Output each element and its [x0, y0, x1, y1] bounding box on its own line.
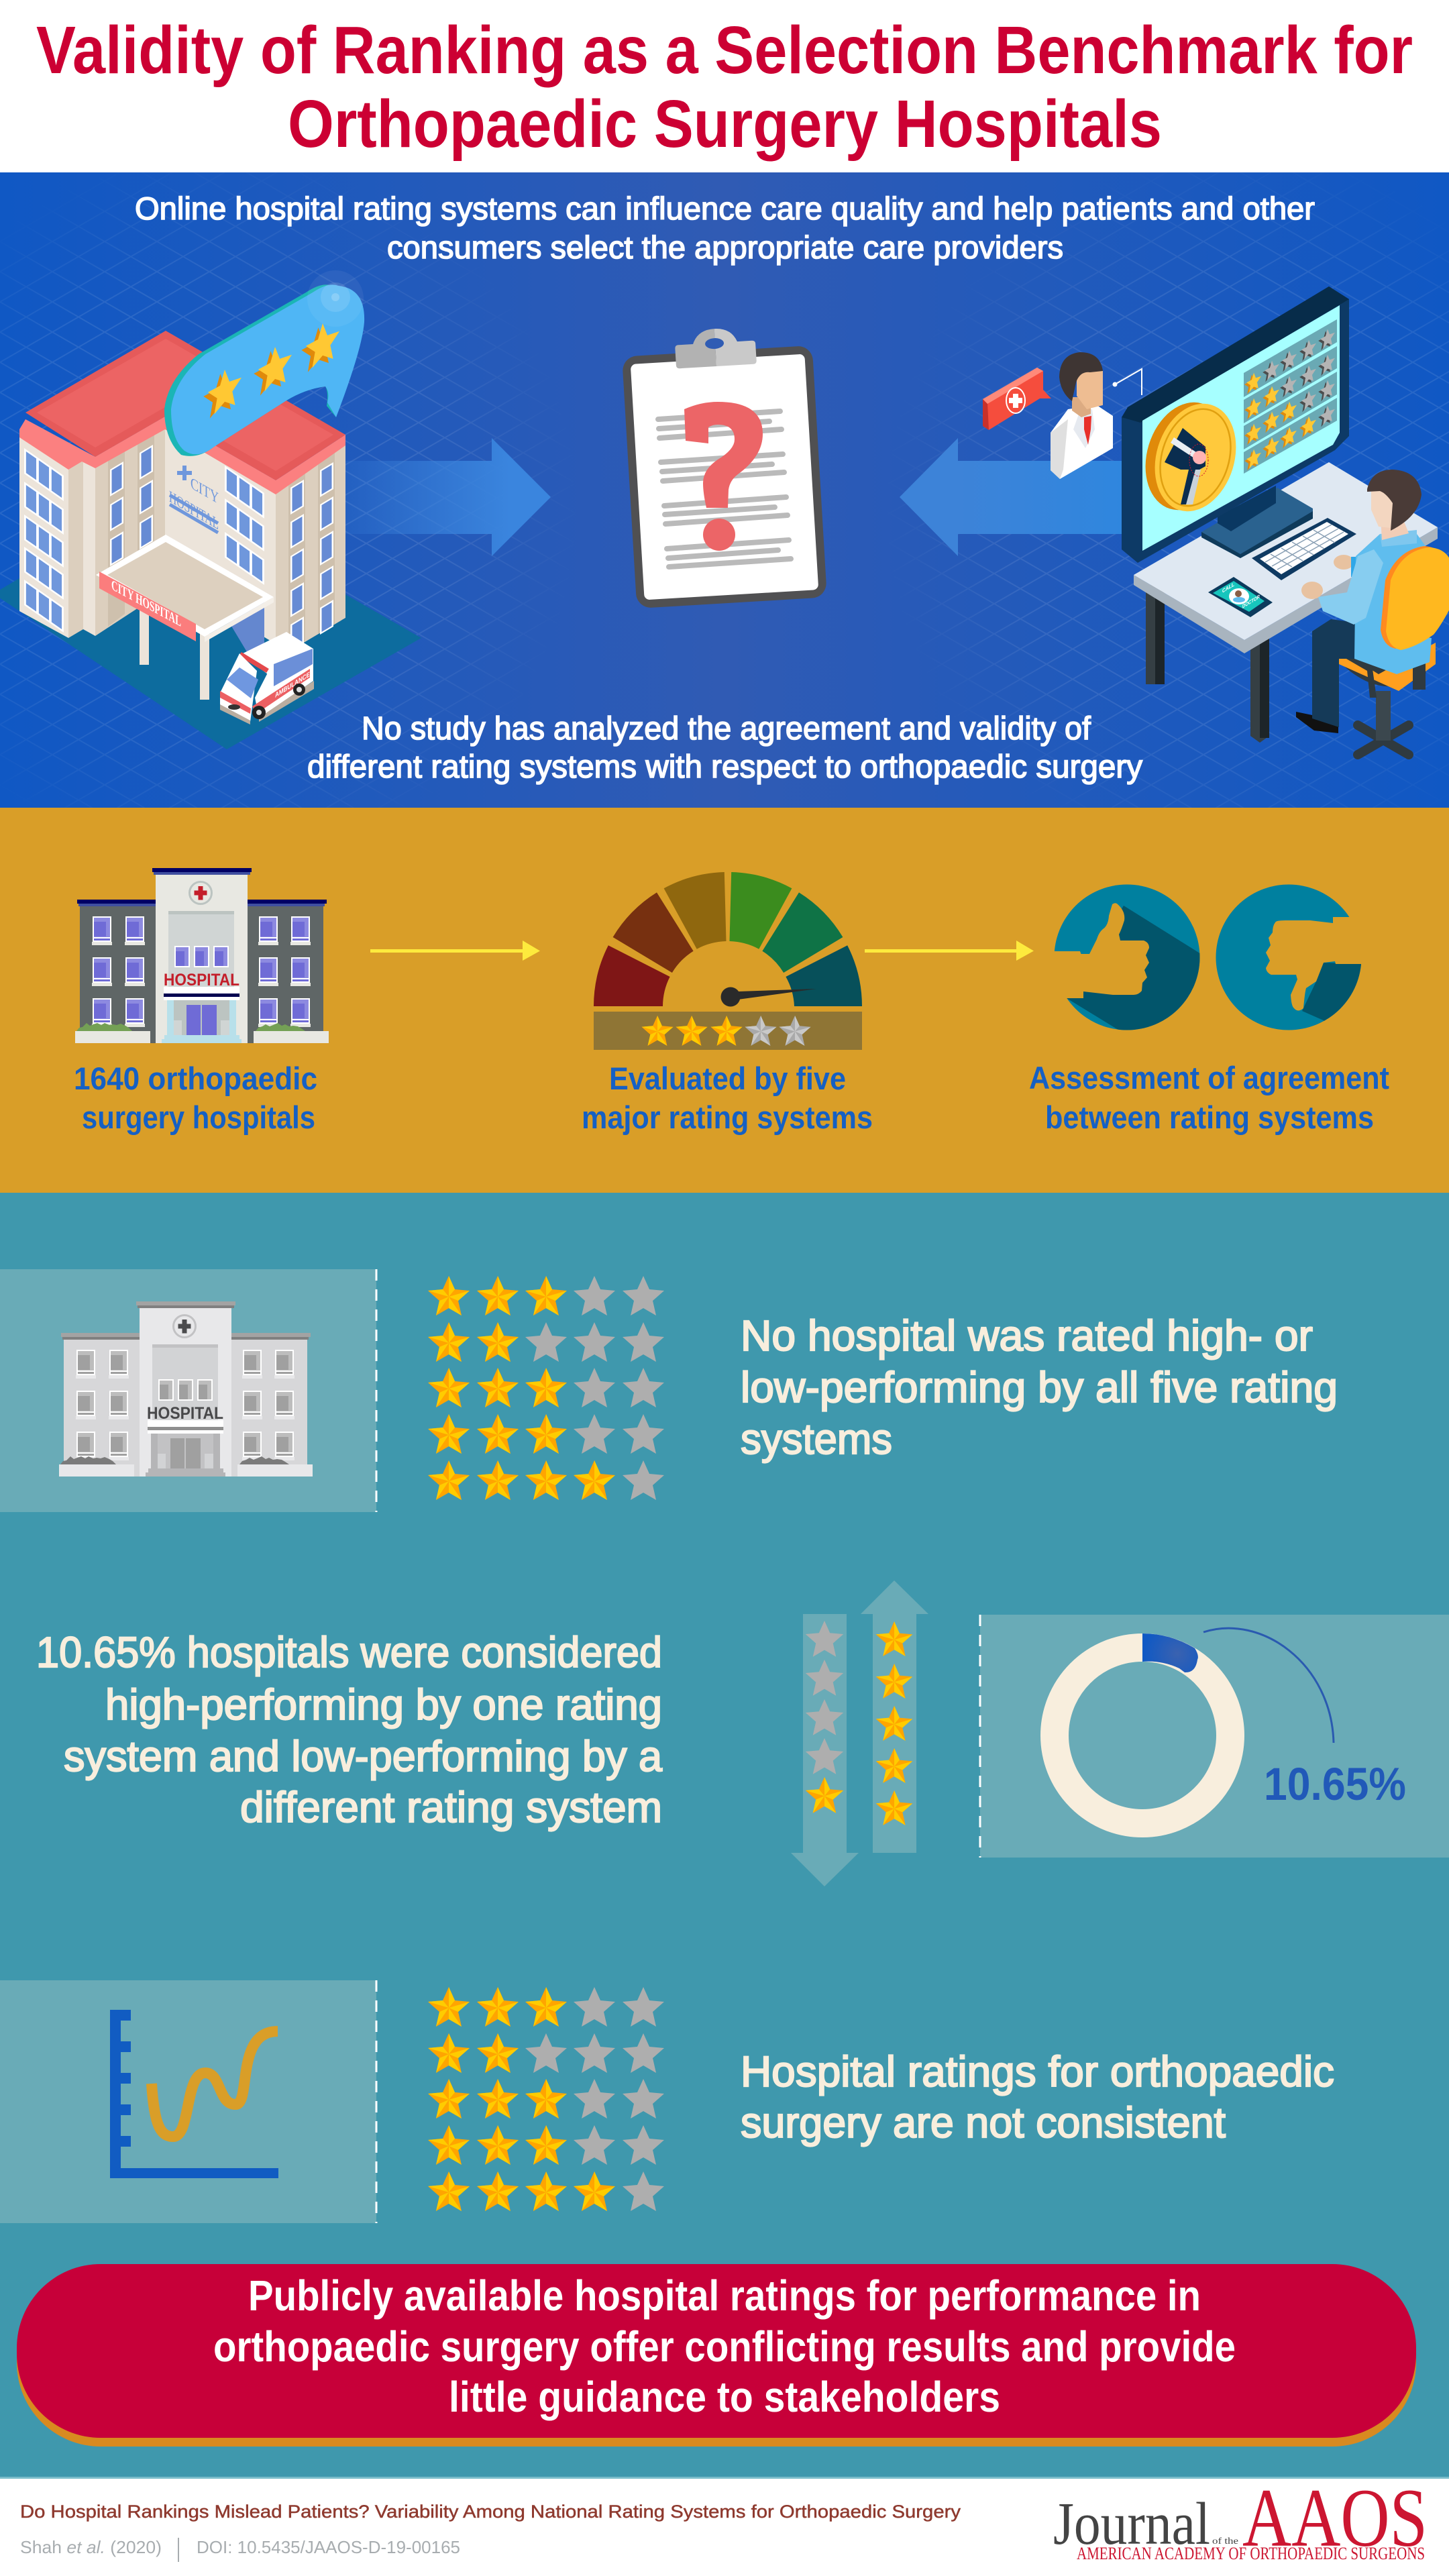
finding 2: text: system and low-performing by a [64, 1732, 662, 1780]
illustration: patient reviewing hospital ratings at computer [1122, 286, 1449, 755]
clipboard clip [674, 327, 757, 369]
on-screen ratings [1244, 319, 1337, 474]
finding 2: up arrow with stars [861, 1580, 928, 1853]
finding 1: text [741, 1311, 1338, 1463]
finding 3: text: Hospital ratings for orthopaedic [741, 2047, 1334, 2096]
entrance canopy: CITY HOSPITAL [111, 576, 181, 630]
phone [1208, 577, 1273, 617]
title [36, 13, 1413, 162]
intro text: consumers select the appropriate care providers [387, 229, 1063, 265]
title: Orthopaedic Surgery Hospitals [288, 87, 1162, 162]
finding 1: text: No hospital was rated high- or [741, 1311, 1313, 1360]
callout: conclusion [17, 2264, 1416, 2447]
computer monitor [1122, 286, 1349, 563]
icon: thumbs down [1216, 884, 1368, 1033]
finding 1: star rating grid [428, 1276, 664, 1500]
finding 2: down arrow with stars [791, 1614, 859, 1886]
text: assessment: Assessment of agreement [1029, 1060, 1389, 1095]
arrow: hospital to clipboard [345, 438, 551, 556]
finding 2: text: different rating system [240, 1783, 662, 1831]
finding 1: hospital panel [0, 1269, 376, 1512]
ambulance: AMBULANCE [275, 671, 310, 700]
donut chart 10.65% [1055, 1633, 1230, 1823]
leader line [1203, 1628, 1334, 1743]
arrow [370, 941, 540, 961]
arrow: computer to clipboard [900, 438, 1122, 556]
text: rating systems: Evaluated by five [609, 1061, 846, 1096]
footer citation [20, 2502, 961, 2562]
callout: conclusion: little guidance to stakeholders [449, 2373, 1000, 2421]
finding 3: text: surgery are not consistent [741, 2098, 1226, 2147]
text lines [658, 411, 791, 567]
illustration: doctor with medical speech bubble [983, 352, 1142, 479]
text: hospitals: surgery hospitals [82, 1099, 315, 1135]
chair base [1335, 637, 1436, 755]
entrance canopy [96, 535, 274, 700]
finding 3: star rating grid [428, 1987, 664, 2211]
conclusion text of blue panel: No study has analyzed the agreement and validity of [362, 711, 1091, 747]
icon: gray hospital [59, 1301, 313, 1477]
illustration: isometric city hospital with rating bubble [0, 270, 421, 749]
intro text: Online hospital rating systems can influence care quality and help patients and other [135, 191, 1315, 226]
panel: background and problem [0, 172, 1449, 808]
coin with knee [1133, 392, 1248, 521]
logo: Journal of the AAOS: of the [1212, 2536, 1238, 2546]
phone: DOCTOR [1242, 593, 1260, 610]
finding 1: text: systems [741, 1415, 892, 1463]
panel: results [0, 1193, 1449, 2479]
finding 3: text [741, 2047, 1334, 2147]
icon: hospital building: HOSPITAL [164, 971, 239, 989]
callout: conclusion: Publicly available hospital ratings for performance in [248, 2271, 1201, 2320]
person [1296, 470, 1432, 733]
logo: Journal of the AAOS [1053, 2472, 1428, 2564]
value label: 10.65% [1264, 1758, 1406, 1810]
icon: clipboard with question mark [622, 327, 827, 608]
callout: conclusion: orthopaedic surgery offer conflicting results and provide [213, 2322, 1236, 2371]
text: rating systems [582, 1061, 873, 1135]
conclusion text of blue panel: different rating systems with respect to orthopaedic surgery [307, 749, 1142, 785]
icon: thumbs up [1055, 884, 1199, 1030]
icon: hospital building [75, 868, 329, 1043]
icon: gray hospital: HOSPITAL [147, 1404, 223, 1423]
phone: CALL [1222, 581, 1235, 594]
arrow [865, 941, 1034, 961]
panel: methods [0, 808, 1449, 1193]
wall sign: CITY [191, 474, 219, 508]
wall sign [169, 466, 219, 533]
finding 2: text: 10.65% hospitals were considered [36, 1628, 662, 1676]
ambulance [220, 632, 314, 724]
text: assessment [1029, 1060, 1389, 1135]
intro text [135, 191, 1315, 265]
icon: gauge with star rating [594, 872, 862, 1050]
text: hospitals [74, 1061, 317, 1135]
finding 1: text: low-performing by all five rating [741, 1363, 1338, 1411]
finding 2: text: high-performing by one rating [105, 1680, 662, 1729]
wall sign: HOSPITAL [169, 487, 219, 533]
text: hospitals: 1640 orthopaedic [74, 1061, 317, 1096]
footer citation: Shah et al. (2020) [20, 2537, 162, 2557]
footer citation: Do Hospital Rankings Mislead Patients? Variability Among National Rating Systems for Orthopaedic Surgery [20, 2502, 961, 2522]
finding 3: chart panel [0, 1980, 376, 2223]
monitor stand [1201, 486, 1313, 558]
rating speech bubble [164, 270, 364, 456]
text: assessment: between rating systems [1045, 1099, 1374, 1135]
logo: Journal of the AAOS: Journal [1053, 2491, 1210, 2557]
finding 2: donut chart panel [980, 1615, 1449, 1858]
text: rating systems: major rating systems [582, 1099, 873, 1135]
chair back [1381, 546, 1449, 650]
question mark [684, 402, 763, 551]
icon: fluctuating line chart [110, 2010, 278, 2178]
finding 2: text [36, 1628, 662, 1831]
roof [19, 331, 345, 494]
footer citation: DOI: 10.5435/JAAOS-D-19-00165 [197, 2537, 460, 2557]
keyboard [1252, 518, 1356, 580]
desk [1134, 462, 1438, 743]
conclusion text of blue panel [307, 711, 1142, 785]
